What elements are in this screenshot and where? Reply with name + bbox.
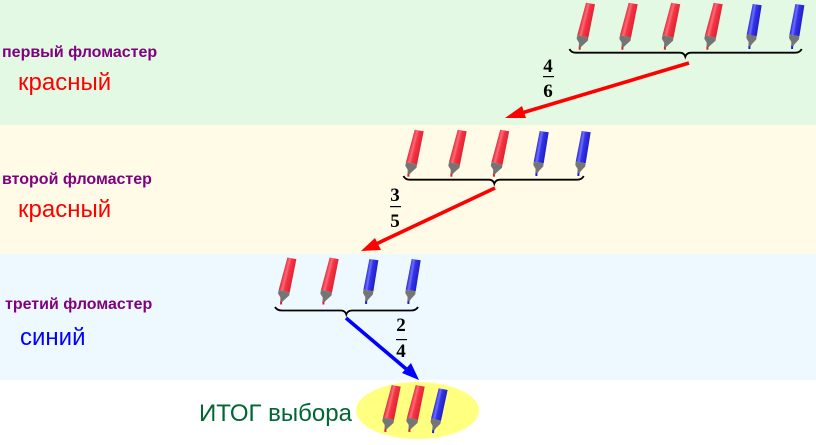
arrow: first to second bbox=[505, 63, 689, 118]
fraction: 4/6 bbox=[543, 56, 554, 102]
arrow: second to third bbox=[361, 188, 495, 251]
value: red: красный bbox=[18, 69, 111, 96]
fraction: 2/4: 4 bbox=[396, 341, 406, 362]
fraction: 4/6: 6 bbox=[543, 81, 553, 102]
result ellipse bbox=[356, 382, 479, 439]
value: red: красный bbox=[18, 196, 111, 223]
fraction: 3/5 bbox=[390, 185, 401, 232]
band: third marker bbox=[0, 254, 816, 380]
markers: second row bbox=[405, 130, 591, 177]
fraction: 4/6: 4 bbox=[543, 56, 553, 77]
label: first marker: первый фломастер bbox=[2, 44, 157, 61]
brace: third row bbox=[275, 307, 418, 314]
fraction: 3/5: 5 bbox=[390, 211, 400, 232]
markers: result bbox=[382, 385, 448, 434]
label: third marker: третий фломастер bbox=[5, 296, 153, 313]
fraction: 3/5: 3 bbox=[390, 185, 400, 206]
value: blue: синий bbox=[20, 324, 85, 351]
fraction: 2/4 bbox=[396, 315, 407, 362]
fraction: 2/4: 2 bbox=[396, 315, 406, 336]
markers: third row bbox=[278, 258, 421, 304]
label: second marker: второй фломастер bbox=[2, 171, 152, 188]
arrow: third to result bbox=[346, 318, 419, 380]
result label: ИТОГ выбора bbox=[199, 400, 353, 427]
band: first marker bbox=[0, 0, 816, 125]
brace: first row bbox=[570, 49, 802, 57]
brace: second row bbox=[404, 176, 584, 184]
band: second marker bbox=[0, 125, 816, 254]
markers: first row bbox=[577, 3, 804, 50]
